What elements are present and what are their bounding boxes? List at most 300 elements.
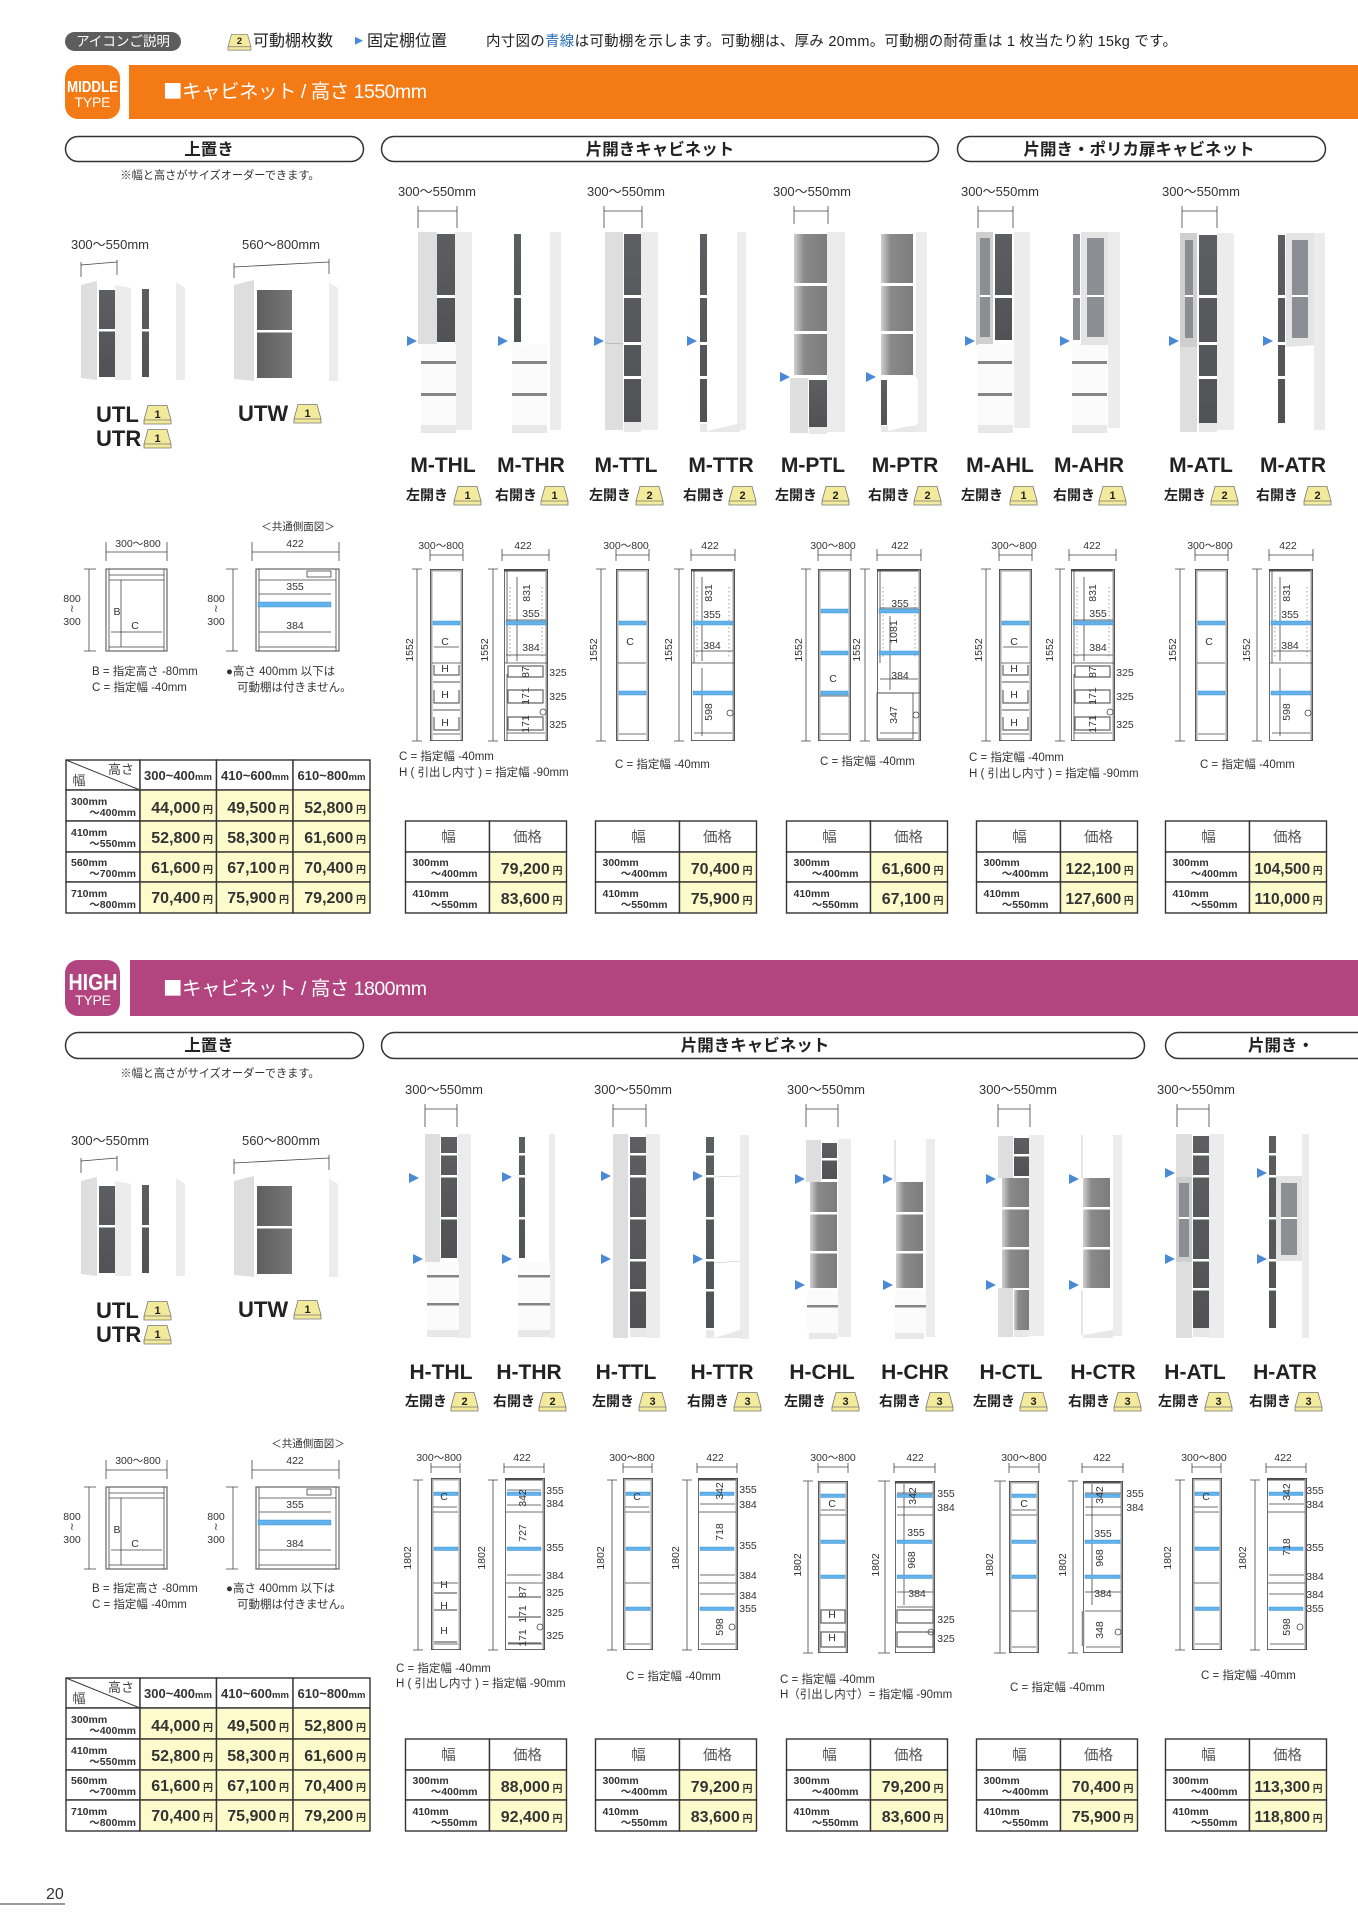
note: custom size: ※幅と高さがサイズオーダーできます。 [120,1066,320,1080]
line drawing: H-AT: 300～800 [1181,1452,1227,1464]
line drawing: H-TT: 355 [739,1603,757,1615]
cabinet: H-CTL [998,1135,1044,1337]
line drawing: M-AH: 1552 [1044,638,1056,662]
line drawing: M-AH: 831 [1087,584,1099,602]
line drawing: H-CT [984,1452,1144,1653]
line drawing: H-CT: 384 [1126,1502,1144,1514]
price table: H-TH: ～550mm [431,1817,478,1829]
category pill: hinged cabinets: 片開きキャビネット [586,139,734,159]
door direction labels and shelf badges: 右開き [493,1393,535,1409]
price table: M-TT: 幅 [631,829,646,846]
legend text: fixed shelf position: 固定棚位置 [367,32,447,50]
line drawing: M-TH: 831 [521,584,533,602]
common section drawings: top units: 300 [207,1534,225,1546]
price table: M-AT [1166,821,1326,913]
line drawing: M-TT: 831 [703,584,715,602]
line drawing: M-AH: 87 [1087,666,1099,678]
note: H-TT: C = 指定幅 -40mm [626,1669,721,1683]
line drawing: H-TH: 384 [546,1498,564,1510]
price table: H-CT: 300mm [984,1775,1020,1787]
UTW cabinet with dimension: 560～800mm [242,1133,320,1148]
price table: top units high: 58,300 円 [227,1748,289,1765]
note: H-CT: C = 指定幅 -40mm [1010,1680,1105,1694]
line drawing: H-TH: 355 [546,1485,564,1497]
common section drawings: top units: B [113,606,121,618]
line drawing: M-TH: H [441,717,449,729]
price table: H-CT: 70,400 円 [1072,1779,1134,1796]
model names: H-ATL [1164,1361,1226,1384]
label UTR: 1 [154,1329,161,1341]
price table: top units high: 610~800mm [298,1686,365,1701]
note: M-PT: C = 指定幅 -40mm [820,754,915,768]
door direction labels and shelf badges: 右開き [687,1393,729,1409]
line drawing: M-TT: 1552 [588,638,600,662]
price table: top units high: 52,800 円 [151,1748,213,1765]
price table: M-TH [406,821,566,913]
panel: high type [63,960,1358,1831]
line drawing: H-TH: 300～800 [416,1452,462,1464]
line drawing: M-AH: H [1010,717,1018,729]
model names: M-TTL [595,454,658,477]
price table: M-PT: 61,600 円 [882,861,944,878]
price table: M-TT: 75,900 円 [691,891,752,908]
price table: top units middle: ～700mm [89,868,136,880]
door direction labels and shelf badges: 左開き [961,487,1003,503]
price table: H-TT: 83,600 円 [691,1809,752,1826]
UTL cabinet with dimension [71,237,149,380]
line drawing: H-CT: 355 [1126,1488,1144,1500]
line drawing: M-AT: 598 [1281,703,1293,721]
door direction labels and shelf badges [406,486,1331,505]
door direction labels and shelf badges: 3 [744,1396,751,1408]
line drawing: H-TH: 1802 [476,1546,488,1570]
cabinet: H-THR [518,1134,555,1338]
line drawing: H-CH: 355 [937,1488,955,1500]
line drawing: M-TH: 384 [522,642,540,654]
price table: top units middle: 49,500 円 [227,800,289,817]
cabinet: M-ATR [1278,233,1325,432]
width labels with dimension bars: 300～550mm [961,184,1039,199]
line drawing: H-TH: 325 [546,1587,564,1599]
price table: top units high: 61,600 円 [151,1778,213,1795]
price table: top units middle: 560mm [71,857,107,869]
price table: top units middle: ～400mm [89,807,136,819]
price table: M-AH: ～400mm [1002,868,1048,880]
price table: H-TT [596,1739,756,1831]
door direction labels and shelf badges: 3 [1124,1396,1131,1408]
common section drawings: top units: ≀ [214,1521,218,1533]
line drawing: H-TH: 355 [546,1542,564,1554]
line drawing: H-CT: 422 [1093,1452,1111,1464]
line drawing: H-AT: 718 [1281,1538,1293,1556]
line drawing: H-AT: 422 [1274,1452,1292,1464]
price table: H-TH: 300mm [412,1775,449,1787]
notes: top units: C = 指定幅 -40mm [92,1597,187,1611]
category pill: top units [66,136,364,162]
line drawing: H-TT [595,1452,757,1650]
line drawing: H-TH: 87 [517,1586,529,1598]
price table: M-TT: 410mm [602,888,639,900]
price table: H-TH: 92,400 円 [501,1809,562,1826]
price table: top units high: 410mm [71,1745,107,1757]
price table: M-AT: 104,500 円 [1254,861,1322,878]
line drawing: H-TT: 384 [739,1499,757,1511]
line drawing: H-CH: 325 [937,1614,955,1626]
UTR cabinet [142,1178,185,1276]
line drawing: M-TH: 325 [549,667,567,679]
door direction labels and shelf badges: 左開き [405,1393,447,1409]
price table: M-TT: ～550mm [621,899,668,911]
category pill: top units [66,1032,364,1058]
cabinet: H-CTR [1082,1135,1122,1338]
cabinet: M-AHL [976,232,1030,433]
line drawing: H-CT: 342 [1094,1486,1106,1504]
line drawing: M-TH: 171 [520,687,532,705]
price table: H-TH: 410mm [412,1806,449,1818]
price table: top units high: ～800mm [89,1817,136,1829]
fixed shelf position arrows [409,1168,1267,1290]
line drawing: M-TH: H [441,689,449,701]
price table: top units middle: 61,600 円 [304,830,366,847]
width labels with dimension bars: 300～550mm [1162,184,1240,199]
common section drawings: top units: 355 [286,581,304,593]
width labels with dimension bars: 300～550mm [587,184,665,199]
line drawing: H-CT: 1802 [1057,1553,1069,1577]
line drawing: M-AH: 1552 [973,638,985,662]
door direction labels and shelf badges: 右開き [1068,1393,1110,1409]
label UTR: UTR [96,426,141,451]
price table: H-TT: 410mm [602,1806,639,1818]
line drawing: H-AT: 1802 [1162,1546,1174,1570]
common section drawings: top units: 300 [63,616,81,628]
price table: H-AT [1166,1739,1326,1831]
legend description: 内寸図の青線は可動棚を示します。可動棚は、厚み 20mm。可動棚の耐荷重は 1 枚当たり約 15kg です。 [486,33,1177,50]
line drawing: M-TH: 325 [549,691,567,703]
width labels with dimension bars [405,1082,1235,1127]
door direction labels and shelf badges: 右開き [683,487,725,503]
line drawing: M-PT: 384 [891,670,909,682]
line drawing: M-PT: 355 [891,598,909,610]
price table: M-TT [596,821,756,913]
door direction labels and shelf badges: 右開き [879,1393,921,1409]
price table: top units middle: 710mm [71,888,107,900]
price table: H-TT: ～400mm [621,1786,668,1798]
line drawing: H-TT: C [633,1491,641,1503]
line drawing: M-TH [404,540,567,741]
cabinet: H-THL [425,1134,471,1338]
price table: H-TH: 88,000 円 [501,1779,562,1796]
door direction labels and shelf badges: 3 [1305,1396,1312,1408]
line drawing: H-TT: 422 [706,1452,724,1464]
UTL cabinet with dimension [71,1133,149,1276]
note: M-AT: C = 指定幅 -40mm [1200,757,1295,771]
common section drawings: top units: 422 [286,538,304,550]
price table: M-PT: 価格 [894,829,923,846]
line drawing: M-TT: 300～800 [603,540,649,552]
common section drawings: top units [63,520,339,651]
price table: H-CH: 79,200 円 [882,1779,944,1796]
price table: M-TH: 価格 [513,829,542,846]
line drawing: M-AT: 1552 [1241,638,1253,662]
line drawing: H-TT: 355 [739,1484,757,1496]
model names: M-ATR [1260,454,1326,477]
line drawing: M-AT: 1552 [1167,638,1179,662]
line drawing: M-TH: 171 [520,715,532,733]
line drawing: H-AT: 355 [1306,1603,1324,1615]
line drawing: H-CH: 325 [937,1633,955,1645]
price table: H-CH: ～550mm [812,1817,858,1829]
line drawing: M-AH: H [1010,663,1018,675]
line drawing: H-CH: H [828,1609,836,1621]
price table: H-TT: 価格 [703,1747,732,1764]
door direction labels and shelf badges: 2 [549,1396,556,1408]
price table: top units middle: 52,800 円 [151,830,213,847]
line drawing: M-AT: 831 [1281,584,1293,602]
notes: top units: ●高さ 400mm 以下は [226,665,335,678]
price table: top units middle: 610~800mm [298,768,365,783]
high section title bar: ■キャビネット / 高さ 1800mm [163,972,427,1001]
label UTL: UTL [96,402,139,427]
line drawing: H-AT [1162,1452,1324,1650]
price table: M-AH: ～550mm [1002,899,1048,911]
label UTR: 1 [154,433,161,445]
line drawing: H-TH: 325 [546,1630,564,1642]
price table: top units middle: 52,800 円 [304,800,366,817]
price table: top units middle: 幅 [72,773,86,788]
notes: top units: ●高さ 400mm 以下は [226,1582,335,1595]
door direction labels and shelf badges: 2 [924,490,931,502]
line drawing: M-AH: 325 [1116,719,1134,731]
price table: H-TT: 幅 [631,1747,646,1764]
label UTL: 1 [154,1305,161,1317]
page number: 20 [46,1886,64,1903]
high type badge [65,960,120,1016]
price table: M-AT: 300mm [1172,857,1209,869]
price table: H-TT: 300mm [602,1775,639,1787]
door direction labels and shelf badges: 3 [842,1396,849,1408]
category pill: hinged cabinets [382,136,938,162]
door direction labels and shelf badges: 3 [936,1396,943,1408]
line drawing: H-CH: 1802 [870,1553,882,1577]
door direction labels and shelf badges: 左開き [592,1393,634,1409]
door direction labels and shelf badges: 2 [832,490,839,502]
line drawing: M-TH: 325 [549,719,567,731]
model names: M-AHR [1054,454,1124,477]
price table: M-TH: 300mm [412,857,449,869]
note: M-TT: C = 指定幅 -40mm [615,757,710,771]
price table: M-TH: 79,200 円 [501,861,562,878]
notes: top units: 可動棚は付きません。 [237,680,352,694]
cabinet: M-AHR [1072,232,1120,433]
door direction labels and shelf badges: 2 [1314,490,1321,502]
price table: M-PT [786,821,948,913]
line drawing: H-TH: 171 [517,1629,529,1647]
price table: H-CT: 価格 [1084,1747,1113,1764]
price table: H-CH: 410mm [794,1806,830,1818]
price table: M-TH: ～400mm [431,868,478,880]
line drawing: M-TT: C [626,636,634,648]
line drawing: M-TH: H [441,663,449,675]
model names: H-THL [410,1361,473,1384]
door direction labels and shelf badges: 右開き [868,487,910,503]
label UTW [238,401,321,426]
line drawing: H-CH: C [828,1498,836,1510]
price table: top units high [66,1678,370,1831]
line drawing: H-AT: 1802 [1237,1546,1249,1570]
line drawing: M-TH: 355 [522,608,540,620]
price table: H-TH: 幅 [441,1747,456,1764]
label UTR: UTR [96,1322,141,1347]
line drawing: M-PT: 422 [891,540,909,552]
line drawing: H-AT: 384 [1306,1571,1324,1583]
price table: top units middle: 410~600mm [221,768,289,783]
model names: M-PTL [781,454,845,477]
cabinet: H-TTL [613,1134,660,1338]
cabinet: H-TTR [706,1135,749,1339]
note: H-TH: H ( 引出し内寸 ) = 指定幅 -90mm [396,1676,566,1690]
door direction labels and shelf badges: 2 [646,490,653,502]
price table: M-TH: 幅 [441,829,456,846]
price table: M-PT: 67,100 円 [882,891,944,908]
price table: top units high: 70,400 円 [304,1778,366,1795]
note: M-TH: H ( 引出し内寸 ) = 指定幅 -90mm [399,765,569,779]
line drawing: H-TT: 342 [714,1482,726,1500]
category pill: polycarbonate door cabinets [958,136,1326,162]
price table: H-CH [786,1739,948,1831]
price table: M-AH: 価格 [1084,829,1113,846]
model names: H-CTR [1070,1361,1136,1384]
middle section title bar [129,65,1358,119]
common section drawings: top units: ≀ [214,603,218,615]
category pill: hinged cabinets: 片開きキャビネット [681,1035,829,1055]
notes: top units: 可動棚は付きません。 [237,1597,352,1611]
UTW cabinet with dimension [234,237,338,381]
price table: H-CT: 75,900 円 [1072,1809,1134,1826]
line drawing: H-CT: 968 [1094,1549,1106,1567]
line drawing: M-TH: 422 [514,540,532,552]
line drawing: H-TT: 384 [739,1570,757,1582]
price table: top units high: 75,900 円 [227,1808,289,1825]
door direction labels and shelf badges: 1 [464,490,471,502]
width labels with dimension bars: 300～550mm [405,1082,483,1097]
door direction labels and shelf badges: 1 [1020,490,1027,502]
common section drawings: top units: 800 [207,1511,225,1523]
note: H-CH: C = 指定幅 -40mm [780,1672,875,1686]
price table: top units high: 410~600mm [221,1686,289,1701]
price table: H-AT: ～550mm [1191,1817,1238,1829]
line drawing: M-AT: 422 [1279,540,1297,552]
door direction labels and shelf badges: 右開き [1053,487,1095,503]
category pill: polycarbonate door cabinets: 片開き・ポリカ扉キャビネット [1024,139,1254,159]
note: custom size: ※幅と高さがサイズオーダーできます。 [120,168,320,182]
width labels with dimension bars: 300～550mm [787,1082,865,1097]
common section drawings: top units: 300 [207,616,225,628]
line drawing: H-CH: 422 [906,1452,924,1464]
label UTL [96,1298,171,1323]
line drawing: H-CH [792,1452,955,1653]
line drawing: H-TH: C [440,1491,448,1503]
line drawing: H-CT: 355 [1094,1528,1112,1540]
price table: top units high: 61,600 円 [304,1748,366,1765]
price table: H-TH: ～400mm [431,1786,478,1798]
line drawing: H-CH: 968 [906,1551,918,1569]
cabinet: M-ATL [1180,233,1234,432]
price table: M-AT: 110,000 円 [1254,891,1322,908]
line drawing: H-TH: 384 [546,1570,564,1582]
common section drawings: top units: ≀ [70,1521,74,1533]
price table: H-AT: 300mm [1172,1775,1209,1787]
line drawing: M-AT: C [1205,636,1213,648]
category pill: hinged cabinets [382,1032,1144,1058]
label UTR [96,426,171,451]
price table: M-AT: ～550mm [1191,899,1238,911]
model names: M-AHL [966,454,1034,477]
line drawing: H-CT: 1802 [984,1553,996,1577]
line drawing: H-AT: 598 [1281,1618,1293,1636]
panel: icon legend [65,32,1177,51]
line drawing: H-TH: 171 [517,1605,529,1623]
line drawing: H-CH: 384 [937,1502,955,1514]
line drawing: H-CT: 348 [1094,1621,1106,1639]
notes: top units [92,1581,352,1611]
price table: H-AT: 118,800 円 [1254,1809,1322,1826]
line drawing: H-TT: 1802 [670,1546,682,1570]
line drawing: M-AH: C [1010,636,1018,648]
line drawing: M-TT: 422 [701,540,719,552]
note: H-CH [780,1672,952,1701]
line drawing: H-AT: 355 [1306,1542,1324,1554]
UTW cabinet with dimension: 560～800mm [242,237,320,252]
label UTW: UTW [238,1297,288,1322]
line drawing: H-TH: H [440,1625,448,1637]
model names: H-ATR [1253,1361,1317,1384]
UTL cabinet with dimension: 300～550mm [71,1133,149,1148]
line drawing: H-TH: H [440,1600,448,1612]
model names: M-PTR [872,454,938,477]
cabinet: M-TTL [605,232,658,432]
page number [0,1886,65,1904]
price table: M-TH: 410mm [412,888,449,900]
door direction labels and shelf badges: 左開き [1164,487,1206,503]
price table: H-AT: ～400mm [1191,1786,1238,1798]
door direction labels and shelf badges: 右開き [1256,487,1298,503]
line drawing: M-AT: 355 [1281,609,1299,621]
cabinet: H-ATL [1176,1134,1224,1338]
price table: M-TT: 300mm [602,857,639,869]
price table: H-CT: ～400mm [1002,1786,1048,1798]
line drawing: H-CH: H [828,1632,836,1644]
price table: top units high: 49,500 円 [227,1718,289,1735]
label UTL [96,402,171,427]
price table: top units high: 高さ [108,1680,134,1695]
high type badge: HIGH [68,969,118,995]
model names: M-THL [410,454,476,477]
line drawing: M-AH: 355 [1089,608,1107,620]
notes: top units [92,664,352,694]
line drawing: M-TT: 1552 [663,638,675,662]
price table: H-TT: ～550mm [621,1817,668,1829]
price table: top units middle: 70,400 円 [304,860,366,877]
line drawing: M-TH: 300～800 [418,540,464,552]
door direction labels and shelf badges: 左開き [1158,1393,1200,1409]
line drawing: H-TT: 718 [714,1523,726,1541]
line drawing: M-AT: 300～800 [1187,540,1233,552]
line drawing: H-TH: 727 [517,1524,529,1542]
price table: top units middle: 高さ [108,762,134,777]
price table: top units high: ～700mm [89,1786,136,1798]
line drawing: M-TH: C [441,636,449,648]
price table: M-TT: 70,400 円 [691,861,752,878]
